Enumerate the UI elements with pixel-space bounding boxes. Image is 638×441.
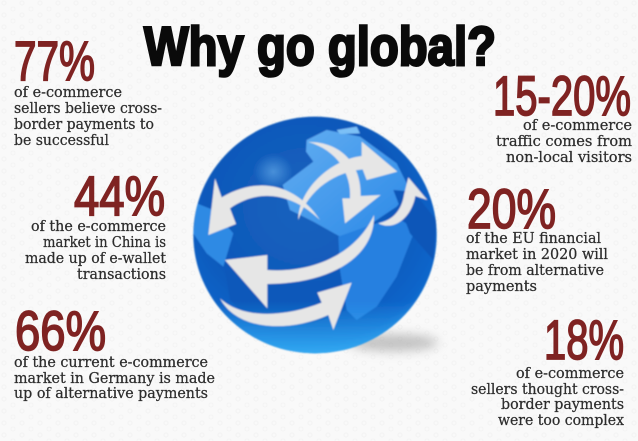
arrow: downward	[308, 142, 381, 223]
stat: 77%: be successful	[14, 133, 109, 149]
arrow: small right	[378, 177, 427, 226]
stat: 18%: sellers thought cross-	[471, 382, 624, 398]
stat: 20%	[466, 177, 608, 295]
stat: 18%: were too complex	[498, 413, 624, 429]
stat: 15-20%: of e-commerce	[523, 118, 632, 134]
stat: 20%: of the EU financial	[466, 231, 601, 247]
stat: 20%: payments	[466, 279, 537, 295]
globe sphere	[193, 117, 437, 353]
arrow: left sweep	[208, 178, 320, 235]
stat: 44%	[25, 164, 166, 283]
arrow: up right	[298, 142, 397, 220]
stat: 44%: transactions	[77, 267, 166, 283]
arrow: big left	[225, 215, 374, 308]
stat: 15-20%: traffic comes from	[496, 134, 632, 150]
stat: 15-20%	[493, 64, 632, 166]
stat: 18%: border payments	[501, 397, 624, 413]
globe shadow	[348, 334, 438, 351]
stat: 77%: of e-commerce	[14, 85, 122, 101]
stat: 66%: of the current e-commerce	[14, 355, 208, 371]
stat: 77%	[14, 29, 162, 149]
stat: 66%: market in Germany is made	[14, 371, 215, 387]
stat: 15-20%: non-local visitors	[506, 150, 632, 166]
stat: 44%: of the e-commerce	[31, 219, 166, 235]
stat: 18%: of e-commerce	[516, 366, 624, 382]
stat: 66%	[14, 299, 215, 402]
stat: 77%: 77%	[14, 29, 95, 92]
globe illustration	[193, 117, 438, 353]
stat: 18%	[471, 308, 624, 429]
stat: 66%: up of alternative payments	[14, 386, 208, 402]
stat: 44%: made up of e-wallet	[25, 251, 166, 267]
title: Why go global?	[144, 15, 496, 77]
stat: 20%: market in 2020 will	[466, 247, 608, 263]
arrow: bottom right	[220, 283, 352, 330]
continents	[193, 117, 437, 353]
stat: 77%: border payments to	[14, 117, 154, 133]
stat: 20%: be from alternative	[466, 263, 604, 279]
stat: 77%: sellers believe cross-	[14, 101, 162, 117]
stat: 66%: 66%	[15, 299, 106, 362]
stat: 44%: market in China is	[43, 235, 166, 251]
stat: 20%: 20%	[467, 177, 556, 240]
stat: 44%: 44%	[74, 164, 165, 227]
